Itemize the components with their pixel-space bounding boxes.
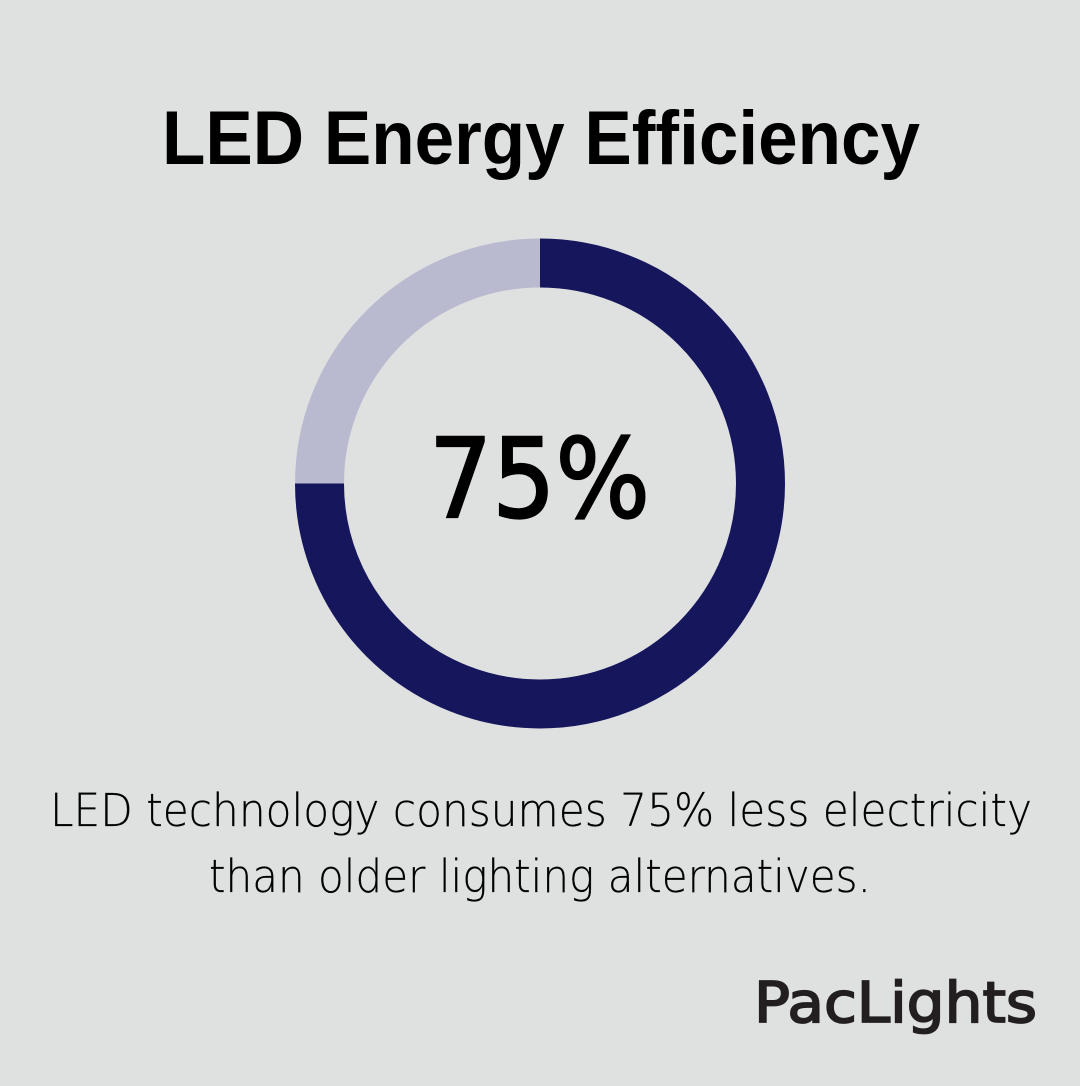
remaining 25 percent arc bbox=[320, 263, 540, 484]
description text: than older lighting alternatives. bbox=[209, 850, 871, 903]
description text: LED technology consumes 75% less electricity bbox=[50, 784, 1032, 837]
donut chart: 75 percent bbox=[320, 263, 760, 704]
center value: 75% bbox=[429, 415, 650, 543]
filled 75 percent arc bbox=[320, 263, 760, 704]
logo: PacLights: PacLights bbox=[754, 971, 1037, 1036]
title: LED Energy Efficiency bbox=[162, 96, 920, 181]
description text bbox=[50, 784, 1032, 903]
